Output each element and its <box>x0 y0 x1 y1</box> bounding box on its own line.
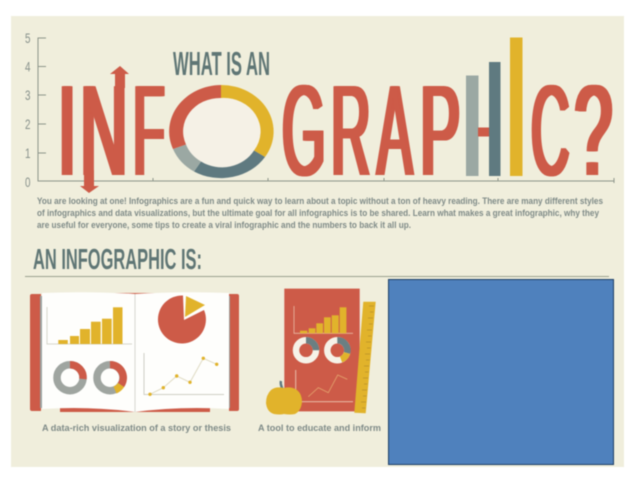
title: INFOGRAPHIC?: I <box>56 59 73 203</box>
pie chart <box>158 295 206 343</box>
clipboard <box>284 288 360 412</box>
title: INFOGRAPHIC? <box>56 36 613 203</box>
clipboard line chart <box>296 370 353 402</box>
subtitle: WHAT IS AN: WHAT IS AN <box>173 45 270 82</box>
book pages <box>42 292 229 412</box>
chart axes with scale numbers: 5 <box>25 31 30 46</box>
book covers <box>30 293 239 412</box>
blue rectangle <box>388 279 614 465</box>
title: INFOGRAPHIC?: F <box>131 59 163 203</box>
chart axes with scale numbers: 2 <box>25 117 30 132</box>
chart axes with scale numbers: 3 <box>25 88 30 103</box>
donut letter O <box>169 85 274 178</box>
title: INFOGRAPHIC?: P <box>418 59 458 203</box>
intro paragraph <box>36 196 604 230</box>
title: INFOGRAPHIC?: A <box>375 59 410 203</box>
arrow: down from N <box>80 170 99 193</box>
letter H made of bars <box>466 62 500 176</box>
donut chart two <box>97 365 123 391</box>
illustration: clipboard, ruler and apple <box>265 288 376 416</box>
letter I as yellow bar <box>510 38 522 176</box>
title: INFOGRAPHIC?: C <box>529 59 567 203</box>
clipboard donut one <box>296 340 316 360</box>
title: INFOGRAPHIC?: G <box>280 59 323 203</box>
bar chart <box>47 307 132 344</box>
intro paragraph: are useful for everyone, some tips to create a viral infographic and the numbers to back it all up. <box>37 220 411 230</box>
line chart <box>144 353 224 396</box>
clipboard bar chart <box>294 306 353 333</box>
heading: AN INFOGRAPHIC IS: AN INFOGRAPHIC IS: <box>33 244 202 276</box>
chart axes with scale numbers: 0 <box>25 175 30 190</box>
caption: book: A data-rich visualization of a story or thesis <box>42 423 231 434</box>
illustration: open book <box>29 292 240 413</box>
ruler <box>354 302 376 413</box>
chart axes with scale numbers: 1 <box>25 146 30 161</box>
caption: clipboard: A tool to educate and inform <box>258 423 381 434</box>
title: INFOGRAPHIC?: R <box>329 59 368 203</box>
donut chart one <box>57 365 83 391</box>
apple <box>266 381 302 414</box>
title: INFOGRAPHIC?: ? <box>572 59 609 203</box>
arrow: up from N <box>110 66 129 88</box>
clipboard donut two <box>327 340 347 360</box>
title: INFOGRAPHIC?: N <box>78 59 125 203</box>
chart axes with scale numbers: 4 <box>25 60 31 74</box>
intro paragraph: of infographics and data visualizations, but the ultimate goal for all infographics is to be shared. Learn what makes a great infographic, why they <box>37 208 599 218</box>
chart axes with scale numbers <box>24 31 615 190</box>
